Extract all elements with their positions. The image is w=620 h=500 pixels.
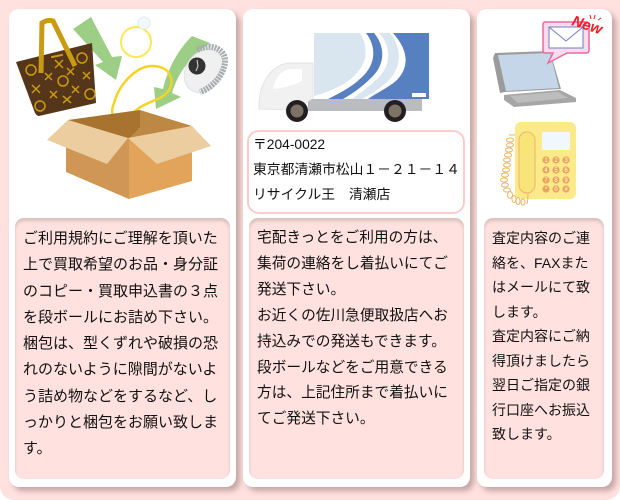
body text: 致します。 [492, 426, 561, 442]
panel: assessment: 6 [564, 168, 568, 174]
illustration: items into box [16, 16, 228, 199]
body text [492, 230, 590, 442]
body text: 発送下さい。 [257, 282, 345, 298]
body text: します。 [492, 304, 547, 320]
body text: 上で買取希望のお品・身分証 [23, 256, 218, 273]
panel: assessment: 7 [544, 178, 548, 184]
text box [249, 218, 464, 479]
icon: truck [258, 33, 429, 122]
panel: assessment: 8 [554, 178, 558, 184]
body text: 査定内容のご連 [492, 230, 590, 246]
text box [15, 218, 230, 479]
panel: assessment: # [564, 187, 568, 193]
body text [257, 229, 448, 427]
address text [253, 137, 460, 202]
panel: assessment: 1 [544, 158, 548, 164]
body text: 行口座へお振込 [492, 402, 590, 418]
body text: てご発送下さい。 [257, 411, 375, 427]
body text: 集荷の連絡をし着払いにてご [257, 256, 448, 272]
icon: telephone [500, 122, 576, 206]
body text: はメールにて致 [492, 279, 590, 295]
panel: assessment: 5 [554, 168, 558, 174]
body text: 梱包は、型くずれや破損の恐 [23, 335, 218, 352]
icon: laptop with mail [493, 13, 606, 107]
body text: 査定内容にご納 [492, 328, 590, 344]
address box [247, 130, 465, 214]
panel: shipping [243, 9, 470, 487]
panel: assessment: * [545, 187, 548, 193]
body text: 持込みでの発送もできます。 [257, 334, 446, 350]
panel: assessment: 9 [564, 178, 568, 184]
body text: 宅配きっとをご利用の方は、 [257, 230, 447, 246]
text box [484, 218, 604, 479]
body text: す。 [23, 440, 52, 457]
body text: う詰め物などをするなど、し [23, 388, 217, 405]
panel: assessment: 2 [554, 158, 558, 164]
body text: 翌日ご指定の銀 [492, 377, 590, 393]
address text: リサイクル王 清瀬店 [253, 187, 390, 202]
body text: を段ボールにお詰め下さい。 [23, 309, 218, 326]
panel: assessment: 4 [544, 168, 548, 174]
body text: れのないように隙間がないよ [23, 361, 217, 378]
body text: お近くの佐川急便取扱店へお [257, 308, 448, 324]
address text: 東京都清瀬市松山１－２１－１４ [253, 162, 460, 177]
body text: っかりと梱包をお願い致しま [23, 414, 218, 431]
body text [23, 230, 218, 457]
body text: 絡を、FAXまた [492, 254, 588, 270]
panel: assessment: 3 [564, 158, 568, 164]
body text: 段ボールなどをご用意できる [257, 360, 448, 376]
label: New: New [570, 13, 606, 39]
body text: 方は、上記住所まで着払いに [257, 385, 448, 401]
body text: ご利用規約にご理解を頂いた [23, 230, 218, 247]
panel: assessment: 0 [554, 187, 558, 193]
address text: 〒204-0022 [253, 137, 325, 152]
body text: 得頂けましたら [492, 352, 590, 368]
panel: packing [9, 9, 236, 487]
body text: のコピー・買取申込書の３点 [23, 283, 218, 300]
panel: assessment [477, 9, 612, 487]
